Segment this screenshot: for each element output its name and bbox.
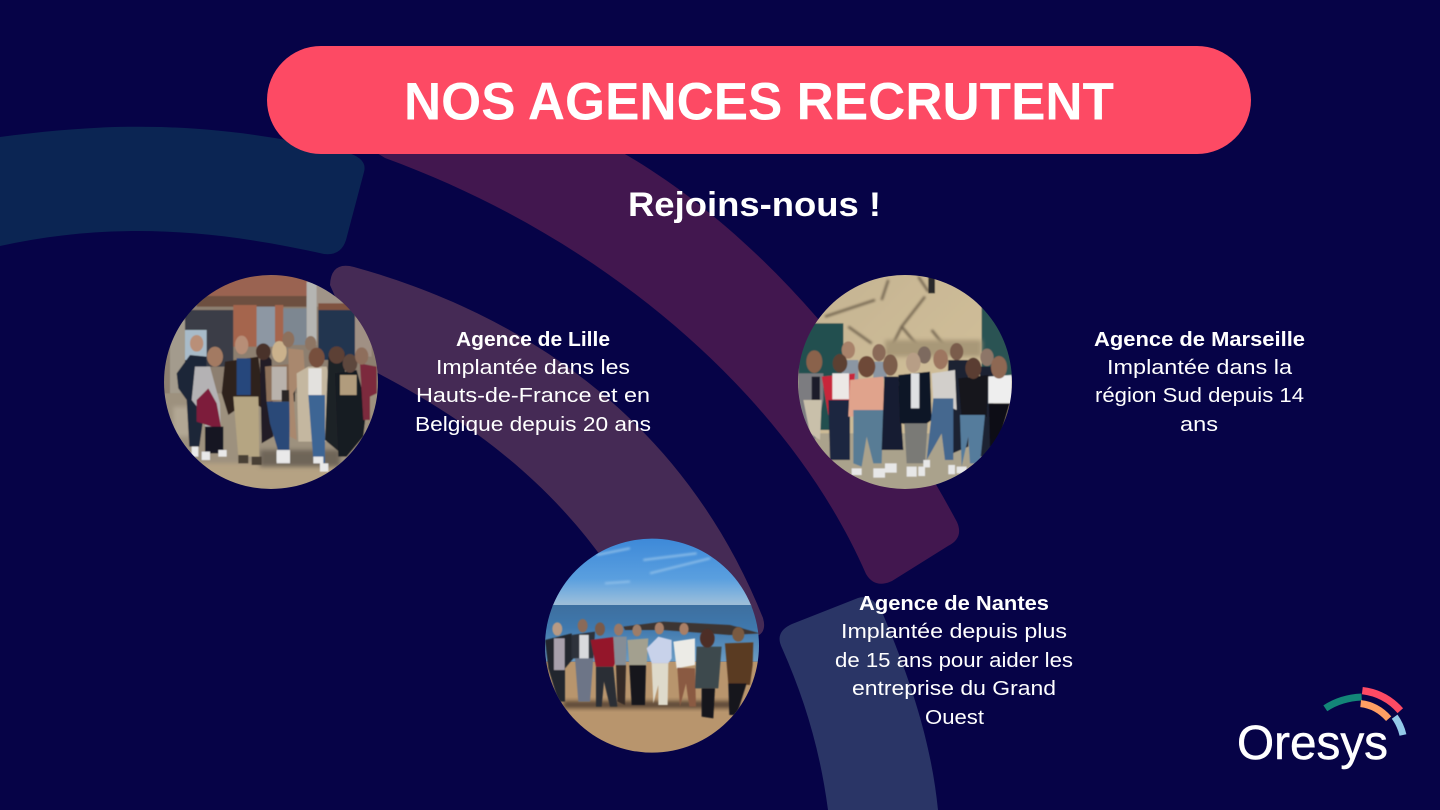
photo: Marseille team [795, 273, 1015, 490]
logo: Oresys [1237, 691, 1403, 770]
people [545, 633, 573, 702]
text: Marseille agency: ans [1180, 414, 1218, 436]
photo: Lille team [163, 273, 380, 490]
text: Nantes agency: Ouest [925, 707, 984, 729]
text: Lille agency: Hauts-de-France et en [416, 385, 650, 407]
background arc: mauve [330, 266, 764, 636]
text: Nantes agency: entreprise du Grand [852, 678, 1056, 700]
heading: Lille: Agence de Lille [456, 329, 610, 351]
text: Nantes agency: Implantée depuis plus [841, 621, 1067, 643]
text: Lille agency [415, 329, 651, 436]
title: NOS AGENCES RECRUTENT [404, 72, 1114, 132]
text: Marseille agency: Implantée dans la [1107, 357, 1293, 379]
text: Nantes agency: de 15 ans pour aider les [835, 650, 1073, 672]
people [842, 341, 855, 359]
text: Marseille agency: région Sud depuis 14 [1095, 385, 1304, 407]
text: Lille agency: Implantée dans les [436, 357, 630, 379]
heading: Nantes: Agence de Nantes [859, 593, 1049, 615]
text: Nantes agency [835, 593, 1073, 729]
logo wordmark: Oresys [1237, 717, 1388, 770]
background arc: blue [780, 597, 938, 810]
title banner [267, 46, 1251, 154]
subtitle: Rejoins-nous ! [628, 186, 881, 224]
logo arcs [1325, 691, 1403, 735]
heading: Marseille: Agence de Marseille [1094, 329, 1305, 351]
banner pill [267, 46, 1251, 154]
people [177, 355, 207, 447]
text: Marseille agency [1094, 329, 1305, 436]
background arc: teal [0, 127, 365, 254]
photo: Nantes team [543, 537, 763, 758]
text: Lille agency: Belgique depuis 20 ans [415, 414, 651, 436]
background arc: purple [372, 150, 959, 584]
